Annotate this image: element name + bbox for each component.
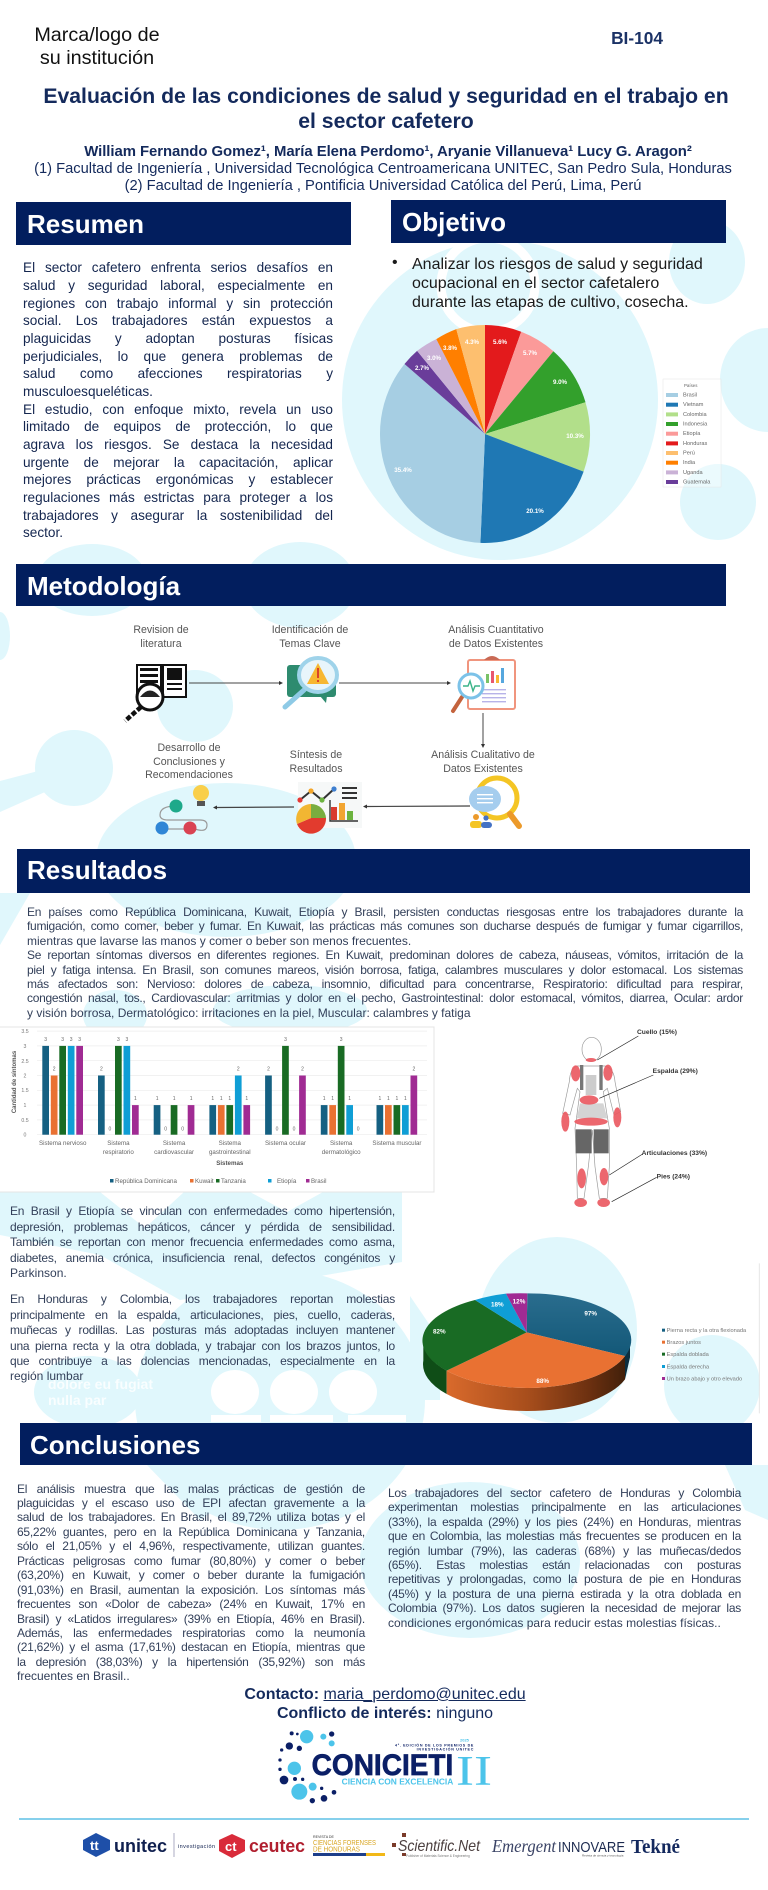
header: poster code: BI-104 — [611, 28, 663, 48]
logo wordmark: CIENCIA CON EXCELENCIA — [342, 1777, 454, 1786]
background: pale blue molecule pattern: nulla par — [48, 1392, 107, 1408]
methodology flow diagram — [124, 624, 544, 834]
text block: Resultados intro: congestión nasal, tos., Cardiovascular: arritmias y dolor en el pecho, Gastrointestinal: dolor estomacal, vómitos, diarrea, Ocular: ardor — [27, 991, 743, 1005]
step labels: Identificación de — [272, 624, 348, 636]
group: Sistema cardiovascular: 1 — [173, 1096, 176, 1102]
contact and conflict of interest — [244, 1686, 526, 1722]
pie legend: Espalda derecha — [667, 1364, 710, 1370]
group: Sistema dermatológico: 3 — [340, 1037, 343, 1043]
text block: Honduras and Colombia postures: que contribuye a las dolencias mencionadas, especialmente en la — [10, 1354, 395, 1368]
pie legend: Uganda — [683, 470, 703, 476]
body silhouette — [563, 1037, 621, 1198]
logo: Tekné: Tekné — [631, 1836, 680, 1858]
x axis categories: respiratorio — [103, 1149, 134, 1156]
group: Sistema ocular: 2 — [301, 1066, 304, 1072]
x axis categories: Sistemas — [216, 1160, 244, 1167]
text block: conclusions right column: condiciones ergonómicas para reducir estas molestias físicas.. — [388, 1616, 721, 1630]
heading: Resultados — [17, 849, 750, 893]
logo wordmark — [312, 1738, 492, 1795]
footer sponsor logos — [83, 1833, 680, 1858]
authors: William Fernando Gomez¹, María Elena Perdomo¹, Aryanie Villanueva¹ Lucy G. Aragon² — [84, 144, 692, 160]
pie labels — [433, 1298, 597, 1385]
pie slices — [380, 325, 590, 543]
group: Sistema nervioso: 2 — [53, 1066, 56, 1072]
x axis categories: Sistema — [163, 1140, 186, 1147]
text block: diseases in Brasil and Etiopía: depresión, problemas hepáticos, cáncer y pérdida de sensibilidad. — [10, 1220, 395, 1234]
text block: Resultados intro: y visión borrosa, Dermatológico: irritaciones en la piel, Muscular: calambres y fatiga — [27, 1006, 471, 1020]
logo: unitec — [83, 1833, 215, 1857]
x axis categories: Sistema — [107, 1140, 130, 1147]
text block: Resumen: salud como afecciones respiratorias y — [23, 366, 333, 381]
icon: results synthesis charts — [296, 782, 362, 834]
x axis categories: Sistema ocular — [265, 1140, 306, 1147]
logo: Emergent: Emergent — [491, 1836, 557, 1856]
y axis: 2.5 — [21, 1059, 29, 1065]
affiliations: (1) Facultad de Ingeniería , Universidad Tecnológica Centroamericana UNITEC, San Pedro Sula, Honduras — [34, 160, 732, 176]
group: Sistema respiratorio: 0 — [109, 1126, 112, 1132]
pie legend: Brasil — [683, 392, 697, 398]
pie percentage labels: 5.6% — [493, 339, 508, 346]
step labels: Temas Clave — [279, 638, 341, 650]
heading: Conclusiones: Conclusiones — [30, 1430, 200, 1460]
text block: Honduras and Colombia postures: una pierna recta y la otra doblada, y trabajar con los brazos juntos, lo — [10, 1339, 395, 1353]
pie percentage labels: 35.4% — [394, 467, 412, 474]
text block: Resumen: agrava los riesgos. Se destaca la necesidad — [23, 437, 333, 452]
pie percentage labels: 5.7% — [523, 350, 538, 357]
title: el sector cafetero — [298, 110, 474, 132]
text block: Resumen: mejores prácticas ergonómicas y establecer — [23, 472, 333, 487]
y axis: 0 — [24, 1133, 27, 1139]
affiliations: (2) Facultad de Ingeniería , Pontificia Universidad Católica del Perú, Lima, Perú — [125, 178, 641, 194]
text block: conclusions left column: 65,22% guantes, pero en la República Dominicana y Tanzania, — [17, 1525, 365, 1539]
pie percentage labels — [394, 339, 584, 515]
text block: conclusions left column: frecuentes son «Dolor de cabeza» (24% en Kuwait, 17% en — [17, 1597, 365, 1611]
pie percentage labels: 4.3% — [465, 339, 480, 346]
group: Sistema respiratorio: 3 — [117, 1037, 120, 1043]
y axis: 0.5 — [21, 1118, 29, 1124]
y axis: 3.5 — [21, 1029, 29, 1035]
pie legend: Indonesia — [683, 422, 708, 428]
text block: Resumen: sector. — [23, 525, 63, 540]
logo: Innovare: Revista de ciencia y tecnología — [582, 1854, 624, 1858]
text block: Honduras and Colombia postures: región lumbar — [10, 1369, 83, 1383]
pie labels: 18% — [491, 1302, 504, 1309]
logo: ceutec: ct — [225, 1839, 237, 1854]
group: Sistema dermatológico: 1 — [331, 1096, 334, 1102]
step labels: Desarrollo de — [157, 742, 221, 754]
title: Evaluación de las condiciones de salud y seguridad en el trabajo en — [43, 84, 729, 108]
header: institution logo placeholder: Marca/logo de — [34, 24, 160, 46]
group: Sistema ocular: 3 — [284, 1037, 287, 1043]
group: Sistema ocular: 2 — [267, 1066, 270, 1072]
group: Sistema cardiovascular — [154, 1096, 194, 1135]
group: Sistema gastrointestinal — [209, 1066, 250, 1135]
pie legend: Países — [684, 383, 698, 388]
callout labels — [637, 1029, 707, 1181]
group: Sistema muscular — [376, 1066, 417, 1135]
pie labels: 88% — [536, 1378, 549, 1385]
chart legend: Tanzania — [221, 1178, 246, 1185]
icon: clipboard with chart and magnifier — [453, 656, 515, 711]
y axis: 1 — [24, 1103, 27, 1109]
heading: Conclusiones — [20, 1423, 752, 1465]
group: Sistema cardiovascular: 0 — [164, 1126, 167, 1132]
logo: Scientific.Net: Publisher of Materials Science & Engineering — [406, 1854, 470, 1858]
text block: Resultados intro: más afectados son: Nervioso: dolores de cabeza, insomnio, dificultad para concentrarse, Respiratorio: dificultad para respirar, — [27, 977, 743, 991]
pie legend: Brazos juntos — [667, 1340, 701, 1346]
text block: Resumen: plaguicidas y adoptan posturas físicas — [23, 331, 333, 346]
group: Sistema ocular — [265, 1037, 306, 1135]
text block: Objetivo bullet: Analizar los riesgos de salud y seguridad — [412, 256, 703, 273]
pie percentage labels: 2.7% — [415, 365, 430, 372]
text block: Resultados intro: mientras que lavarse las manos y comer o beber son menos frecuentes. — [27, 934, 411, 948]
background: pale blue molecule pattern: dolore eu fugiat — [48, 1376, 153, 1392]
text block: Resumen — [23, 260, 333, 540]
pie legend: Espalda doblada — [667, 1352, 710, 1358]
bar chart: symptoms by body system — [0, 1026, 434, 1192]
arrow — [213, 806, 294, 810]
group: Sistema cardiovascular: 1 — [190, 1096, 193, 1102]
group: Sistema ocular: 0 — [293, 1126, 296, 1132]
logo: ceutec: ceutec — [249, 1836, 305, 1856]
pie labels: 12% — [513, 1298, 526, 1305]
pie legend: Colombia — [683, 412, 708, 418]
text block: conclusions left column: El análisis muestra que las malas prácticas de gestión de — [17, 1482, 365, 1496]
text block: Honduras and Colombia postures: muñecas y rodillas. Las posturas más adoptadas incluyen mantener — [10, 1323, 395, 1337]
heading: Resultados: Resultados — [27, 855, 167, 885]
group: Sistema nervioso — [42, 1037, 83, 1135]
text block: Resumen: El estudio, con enfoque mixto, revela un uso — [23, 402, 333, 417]
arrow — [189, 681, 283, 685]
arrow — [339, 681, 451, 685]
body diagram: musculoskeletal discomfort zones — [561, 1029, 707, 1207]
text block: conclusions right column: (45%) y la postura de una pierna estirada y la otra doblada en — [388, 1587, 741, 1601]
3D pie chart: postures — [422, 1264, 760, 1414]
pie labels: 97% — [584, 1311, 597, 1318]
callout labels: Pies (24%) — [657, 1174, 690, 1181]
heading: Metodología — [16, 564, 726, 606]
text block: Resumen: musculoesqueléticas. — [23, 384, 153, 399]
icon: newspaper with magnifier — [125, 665, 186, 721]
logo: unitec: tt — [90, 1838, 99, 1853]
group: Sistema dermatológico: 0 — [357, 1126, 360, 1132]
text block: Resultados intro: En países como República Dominicana, Kuwait, Etiopía y Brasil, persisten conductas riesgosas entre los trabajadores durante la — [27, 905, 743, 919]
icon: speech bubble with warning magnifier — [285, 658, 337, 707]
logo: Revista de Ciencias Forenses de Honduras — [313, 1835, 385, 1856]
pie legend: Honduras — [683, 441, 707, 447]
arrow — [481, 713, 485, 748]
logo wordmark: INVESTIGACIÓN UNITEC — [417, 1747, 474, 1752]
logo: unitec: unitec — [114, 1836, 167, 1856]
step labels: Recomendaciones — [145, 769, 233, 781]
group: Sistema muscular: 2 — [413, 1066, 416, 1072]
logo wordmark: 4ª. EDICIÓN DE LOS PREMIOS DE — [395, 1743, 474, 1748]
group: Sistema cardiovascular: 1 — [156, 1096, 159, 1102]
x axis categories: gastrointestinal — [209, 1149, 251, 1156]
text block: Resumen: urgente de mejorar la capacitación, aplicar — [23, 455, 333, 470]
y axis: 2 — [24, 1074, 27, 1080]
logo: ceutec — [219, 1834, 305, 1858]
pie legend: Etiopía — [683, 431, 701, 437]
logo: unitec: investigación — [178, 1844, 215, 1850]
icon: conclusions light bulb and checklist path — [156, 785, 209, 834]
group: Sistema ocular: 0 — [276, 1126, 279, 1132]
group: Sistema nervioso: 3 — [70, 1037, 73, 1043]
text block: Honduras and Colombia postures: principalmente en la espalda, articulaciones, pies, cuello, caderas, — [10, 1308, 395, 1322]
text block: conclusions left column: sólo el 21,05% y el 4,96%, respectivamente, utilizan guantes. — [17, 1539, 365, 1553]
step labels: Datos Existentes — [443, 763, 523, 775]
text block: conclusions right column: Colombia (97%). Los datos sugieren la necesidad de mejorar las — [388, 1601, 741, 1615]
text block: conclusions right column: Los trabajadores del sector cafetero de Honduras y Colombia — [388, 1486, 741, 1500]
text block: conclusions left column: Brasil) y «Latidos irregulares» (39% en Etiopía, 46% en Brasil). — [17, 1612, 365, 1626]
chart legend: República Dominicana — [115, 1178, 177, 1185]
text block: Resumen: salud y seguridad laboral, especialmente en — [23, 278, 333, 293]
group: Sistema nervioso: 3 — [44, 1037, 47, 1043]
group: Sistema gastrointestinal: 1 — [211, 1096, 214, 1102]
pie top slices — [422, 1293, 631, 1388]
logo: Scientific.Net: Scientific.Net — [398, 1838, 480, 1855]
text block: diseases in Brasil and Etiopía: diabetes, anemia crónica, insuficiencia renal, defectos congénitos y — [10, 1251, 395, 1265]
text block: conclusions right column: (65%). Estas molestias están relacionadas con posturas — [388, 1558, 741, 1572]
step labels: Análisis Cualitativo de — [431, 749, 535, 761]
pie legend — [662, 1328, 747, 1382]
chart legend: Brasil — [311, 1178, 326, 1185]
group: Sistema nervioso: 3 — [78, 1037, 81, 1043]
callout labels: Espalda (29%) — [653, 1068, 698, 1075]
x axis categories: Sistema — [219, 1140, 242, 1147]
text block: Resultados intro: Se reportan síntomas diversos en diferentes regiones. En Kuwait, predominan dolores de cabeza, náuseas, vómitos, irritación de la — [27, 948, 743, 962]
header: institution logo placeholder: su institución — [40, 46, 154, 68]
group: Sistema gastrointestinal: 1 — [220, 1096, 223, 1102]
text block: conclusions left column: salud de los trabajadores. En Brasil, el 89,72% utiliza botas y el — [17, 1510, 365, 1524]
logo: Revista de Ciencias Forenses de Honduras: REVISTA DE — [313, 1835, 335, 1839]
text block: conclusions right column: experimentan molestias principalmente en las articulaciones — [388, 1500, 741, 1514]
logo wordmark: II — [456, 1748, 492, 1795]
group: Sistema dermatológico: 1 — [323, 1096, 326, 1102]
y axis: Cantidad de síntomas — [12, 1050, 18, 1113]
group: Sistema muscular: 1 — [379, 1096, 382, 1102]
text block: Resultados intro — [27, 905, 744, 1020]
text block: Resumen: El sector cafetero enfrenta serios desafíos en — [23, 260, 333, 275]
step labels: Resultados — [290, 763, 342, 775]
step labels: Síntesis de — [290, 749, 342, 761]
group: Sistema muscular: 1 — [387, 1096, 390, 1102]
group: Sistema respiratorio — [98, 1037, 139, 1135]
pie legend: Pierna recta y la otra flexionada — [667, 1328, 747, 1334]
contact and conflict of interest: Conflicto de interés: ninguno — [277, 1705, 493, 1722]
callout labels: Articulaciones (33%) — [642, 1150, 707, 1157]
step labels: Análisis Cuantitativo — [448, 624, 544, 636]
text block: conclusions right column: que en Colombia, las molestias más frecuentes se producen en la — [388, 1529, 741, 1543]
text block: conclusions left column: (91,03%) en Brasil, aumentan la exposición. Los síntomas más — [17, 1583, 365, 1597]
icon: qualitative analysis magnifier — [469, 778, 519, 828]
group: Sistema respiratorio: 2 — [100, 1066, 103, 1072]
group: Sistema gastrointestinal: 2 — [237, 1066, 240, 1072]
text block: diseases in Brasil and Etiopía — [10, 1204, 396, 1280]
text block: Honduras and Colombia postures — [10, 1292, 396, 1383]
logo: Revista de Ciencias Forenses de Honduras: DE HONDURAS — [313, 1844, 360, 1854]
group: Sistema respiratorio: 1 — [134, 1096, 137, 1102]
text block: Objetivo bullet: durante las etapas de cultivo, cosecha. — [412, 294, 689, 311]
chart legend — [110, 1178, 326, 1185]
text block: conclusions left column: la depresión (38,03%) y la hipertensión (35,92%) son más — [17, 1655, 365, 1669]
text block: Objetivo bullet: • — [392, 254, 398, 271]
logo: Innovare: INNOVARE — [558, 1839, 625, 1856]
pie percentage labels: 10.3% — [566, 433, 584, 440]
text block: diseases in Brasil and Etiopía: Parkinson. — [10, 1266, 67, 1280]
y axis: 3 — [24, 1044, 27, 1050]
text block: Resumen: regiones con trabajo informal y sin protección — [23, 296, 333, 311]
callout lines — [597, 1036, 657, 1202]
contact and conflict of interest: Contacto: maria_perdomo@unitec.edu — [244, 1686, 526, 1703]
header: institution logo placeholder — [34, 24, 160, 68]
text block: Resumen: perjudiciales, lo que genera problemas de — [23, 349, 333, 364]
x axis categories: cardiovascular — [154, 1149, 194, 1156]
text block: conclusions left column: (21,62%) y el asma (17,61%) destacan en Etiopía, mientras que — [17, 1640, 365, 1654]
text block: Resumen: limitado de equipos de protección, lo que — [23, 419, 333, 434]
y axis — [12, 1029, 29, 1139]
title — [43, 84, 729, 132]
group: Sistema cardiovascular: 0 — [181, 1126, 184, 1132]
heading: Objetivo: Objetivo — [402, 207, 506, 237]
pie labels: 82% — [433, 1328, 446, 1335]
text block: conclusions right column: repetitivas y prolongadas, como la postura de pie en Honduras — [388, 1572, 741, 1586]
text block: diseases in Brasil and Etiopía: También se reportan con menor frecuencia enfermedades como asma, — [10, 1235, 395, 1249]
step labels: Revision de — [133, 624, 189, 636]
x axis categories: Sistema nervioso — [39, 1140, 87, 1147]
text block: conclusions right column: región lumbar (79%), las caderas (68%) y las muñecas/dedos — [388, 1544, 741, 1558]
callout labels: Cuello (15%) — [637, 1029, 677, 1036]
group: Sistema nervioso: 3 — [61, 1037, 64, 1043]
logo: Scientific.Net — [392, 1833, 480, 1858]
pie percentage labels: 9.0% — [553, 379, 568, 386]
pie legend: Un brazo abajo y otro elevado — [667, 1376, 742, 1382]
heading: Resumen: Resumen — [27, 209, 144, 239]
step labels — [133, 624, 544, 781]
chart legend: Kuwait — [195, 1178, 214, 1185]
text block: conclusions left column — [17, 1482, 366, 1683]
logo: CONICIETI II — [278, 1730, 492, 1804]
group: Sistema dermatológico: 1 — [348, 1096, 351, 1102]
step labels: de Datos Existentes — [449, 638, 543, 650]
group: Sistema muscular: 1 — [404, 1096, 407, 1102]
arrow — [363, 804, 470, 808]
logo wordmark: 2025 — [460, 1738, 470, 1743]
group: Sistema dermatológico — [321, 1037, 360, 1135]
heading: Resumen — [16, 202, 351, 245]
pie percentage labels: 20.1% — [526, 508, 544, 515]
pie chart: coffee producing countries — [380, 325, 722, 543]
pie percentage labels: 3.0% — [427, 355, 442, 362]
molecule dots — [278, 1730, 336, 1803]
pie legend: Vietnam — [683, 402, 704, 408]
pie legend — [663, 379, 721, 487]
text block: Resumen: regulaciones más estrictas para proteger a los — [23, 490, 333, 505]
text block: conclusions left column: Además, las enfermedades respiratorias como la neumonía — [17, 1626, 365, 1640]
text block: conclusions right column — [388, 1486, 742, 1630]
heading: Metodología: Metodología — [27, 571, 180, 601]
logo wordmark: CONICIETI — [312, 1749, 453, 1782]
group: Sistema gastrointestinal: 1 — [245, 1096, 248, 1102]
logo: Revista de Ciencias Forenses de Honduras: CIENCIAS FORENSES — [313, 1838, 376, 1847]
affiliations — [34, 160, 732, 194]
footer divider — [19, 1818, 749, 1820]
x axis categories: dermatológico — [322, 1149, 361, 1156]
y axis: 1.5 — [21, 1088, 29, 1094]
group: Sistema muscular: 1 — [396, 1096, 399, 1102]
text block: Resultados intro: fumigación, como comer, beber y fumar. En Kuwait, las prácticas más comunes son ducharse después de fumigar y fumar cigarrillos, — [27, 919, 743, 933]
text block: conclusions left column: (63,20%) en Kuwait, y comer o beber durante la fumigación — [17, 1568, 365, 1582]
highlighted pain zones — [561, 1058, 621, 1207]
group: Sistema respiratorio: 3 — [126, 1037, 129, 1043]
heading: Objetivo — [391, 200, 726, 243]
text block: Objetivo bullet: ocupacional en el sector cafetalero — [412, 275, 659, 292]
x axis categories: Sistema — [330, 1140, 353, 1147]
step labels: Conclusiones y — [153, 756, 226, 768]
text block: Objetivo bullet — [392, 254, 703, 311]
pie legend: Perú — [683, 450, 695, 456]
text block: Honduras and Colombia postures: En Honduras y Colombia, los trabajadores reportan molestias — [10, 1292, 395, 1306]
text block: conclusions left column: frecuentes en Brasil.. — [17, 1669, 130, 1683]
text block: Resultados intro: piel y fatiga intensa. En Brasil, son comunes mareos, visión borrosa, fatiga, calambres musculares y dolor estomacal. Los sistemas — [27, 962, 743, 976]
group: Sistema gastrointestinal: 1 — [228, 1096, 231, 1102]
text block: Resumen: social. Los trabajadores están expuestos a — [23, 313, 333, 328]
text block: conclusions left column: plaguicidas y el escaso uso de EPI afectan gravemente a la — [17, 1496, 365, 1510]
pie legend: India — [683, 460, 696, 466]
pie sides — [423, 1340, 630, 1411]
text block: Resumen: trabajadores y asegurar la sostenibilidad del — [23, 508, 333, 523]
x axis categories: Sistema muscular — [372, 1140, 421, 1147]
text block: conclusions right column: (33%), la espalda (29%) y los pies (24%) en Honduras, mientras — [388, 1515, 741, 1529]
pie legend: Guatemala — [683, 480, 711, 486]
text block: conclusions left column: Prácticas peligrosas como fumar (80,80%) y comer o beber — [17, 1554, 365, 1568]
x axis categories — [39, 1140, 421, 1167]
pie percentage labels: 3.8% — [443, 345, 458, 352]
step labels: literatura — [140, 638, 182, 650]
text block: diseases in Brasil and Etiopía: En Brasil y Etiopía se vinculan con enfermedades como hipertensión, — [10, 1204, 395, 1218]
chart legend: Etiopía — [277, 1178, 297, 1185]
